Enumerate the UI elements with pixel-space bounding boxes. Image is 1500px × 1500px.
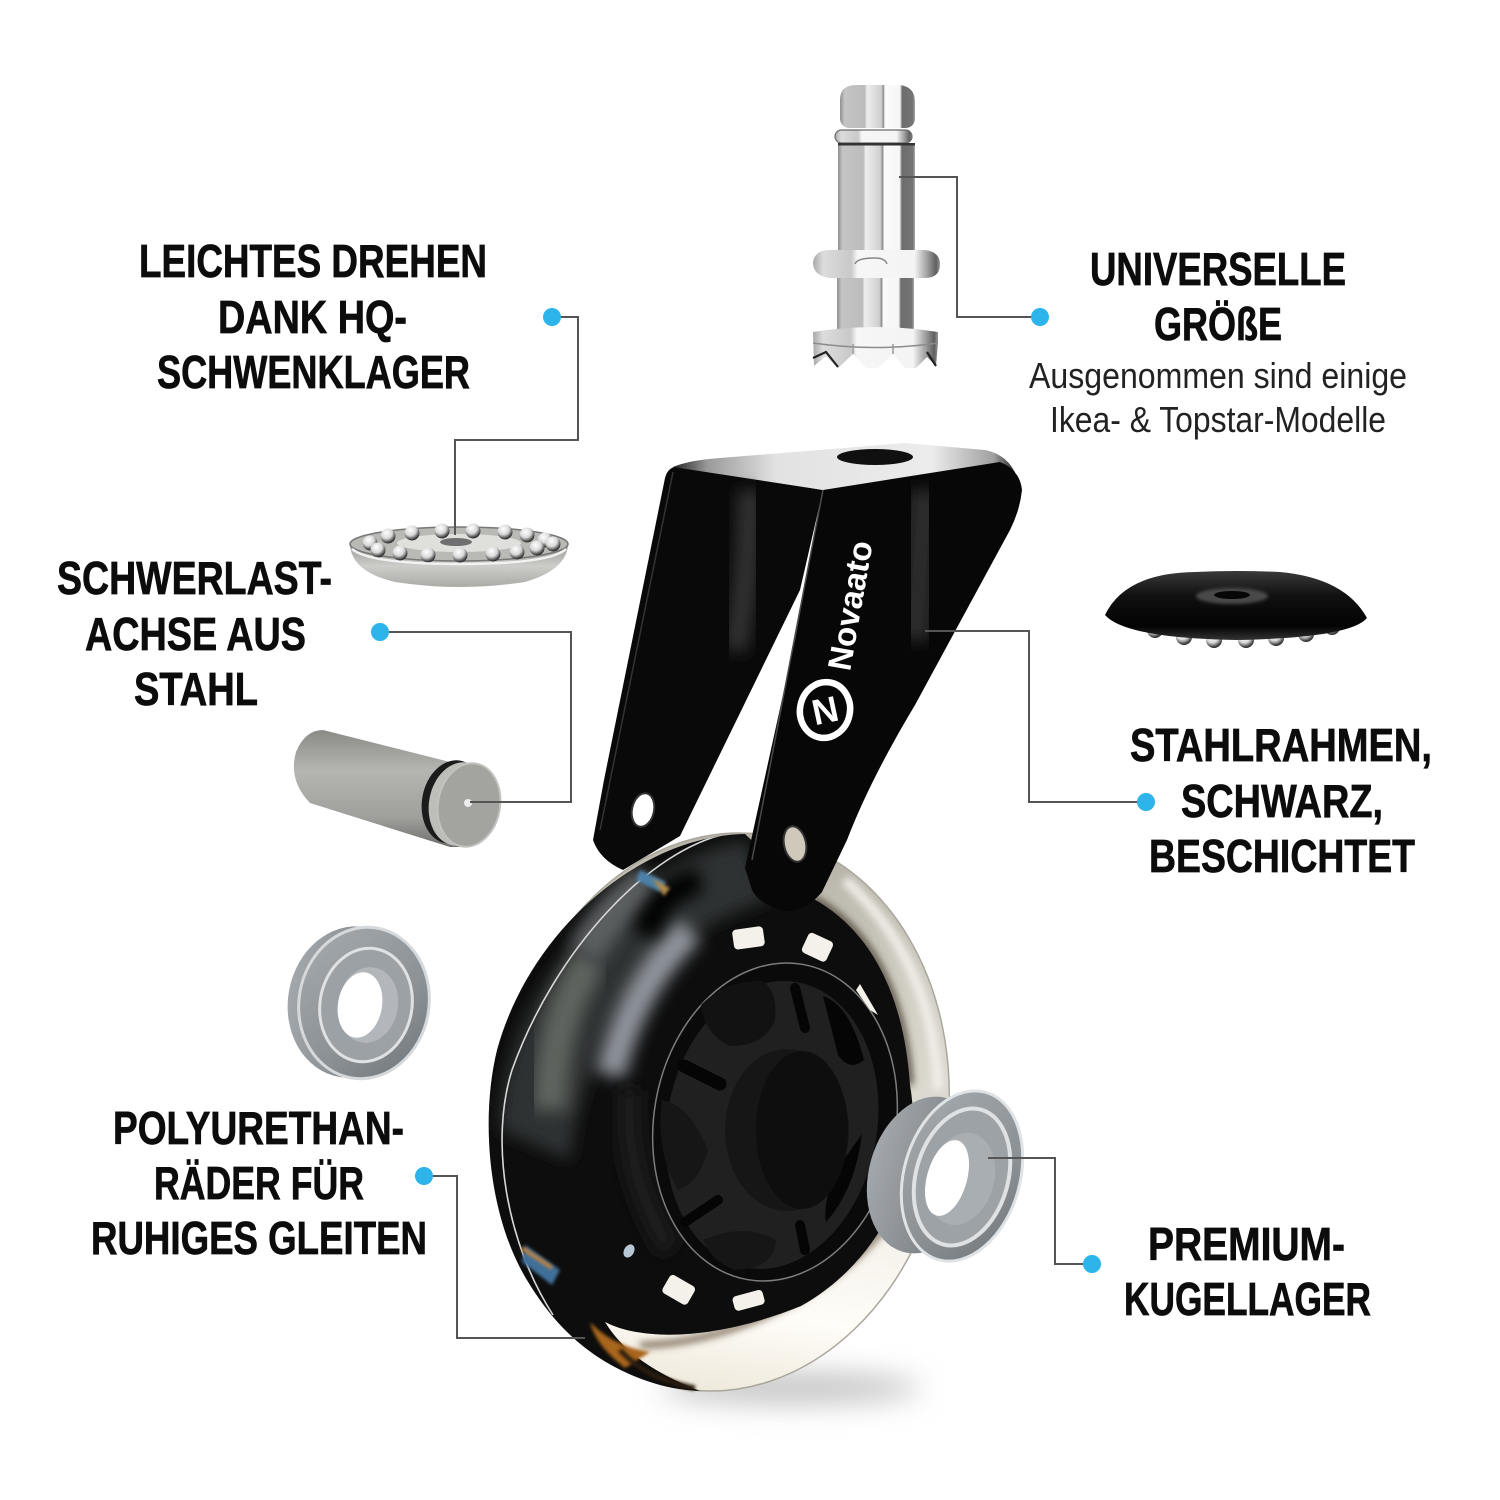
heading: polyurethane wheels: RUHIGES GLEITEN	[91, 1212, 427, 1264]
heading: heavy-duty axle: ACHSE AUS	[85, 608, 306, 660]
heading: heavy-duty axle	[57, 552, 332, 715]
logo: Novaato	[795, 538, 880, 743]
icon: front ball bearing	[849, 1076, 1042, 1276]
heading: premium bearings: KUGELLAGER	[1124, 1273, 1371, 1325]
callout: axle connector	[371, 623, 571, 802]
heading: universal size: UNIVERSELLE	[1090, 243, 1346, 295]
heading: easy swivel: LEICHTES DREHEN	[139, 235, 487, 287]
icon: wheel shadow	[660, 1372, 920, 1404]
callout: premium bearing connector	[988, 1158, 1101, 1273]
heading: polyurethane wheels: RÄDER FÜR	[154, 1157, 364, 1209]
logo: Novaato: Novaato	[820, 538, 880, 673]
callout: steel frame connector	[925, 631, 1155, 811]
logo: Novaato: N	[808, 688, 842, 733]
heading: polyurethane wheels: POLYURETHAN-	[113, 1102, 404, 1154]
heading: steel frame: BESCHICHTET	[1149, 830, 1415, 882]
callout: wheel connector	[415, 1167, 585, 1338]
heading: heavy-duty axle: SCHWERLAST-	[57, 552, 332, 604]
heading: premium bearings	[1124, 1218, 1371, 1325]
icon: ball bearing plate	[350, 524, 568, 587]
text: exceptions note: Ikea- & Topstar-Modelle	[1050, 399, 1386, 440]
heading: steel frame: STAHLRAHMEN,	[1130, 719, 1432, 771]
text: exceptions note: Ausgenommen sind einige	[1029, 355, 1407, 396]
heading: heavy-duty axle: STAHL	[134, 663, 258, 715]
callout: swivel bearing connector	[455, 308, 578, 535]
icon: steel bracket	[593, 443, 1022, 911]
icon: mounting pin	[813, 85, 940, 368]
heading: polyurethane wheels	[91, 1102, 427, 1264]
text: exceptions note	[1029, 355, 1407, 440]
icon: polyurethane wheel	[488, 832, 950, 1393]
heading: easy swivel	[139, 235, 487, 398]
icon: black ball plate	[1105, 571, 1367, 648]
heading: easy swivel: SCHWENKLAGER	[157, 346, 470, 398]
wheel hub	[628, 943, 922, 1301]
wheel window slots	[621, 926, 878, 1312]
heading: steel frame	[1130, 719, 1432, 882]
heading: universal size	[1090, 243, 1346, 350]
heading: easy swivel: DANK HQ-	[218, 291, 407, 343]
heading: premium bearings: PREMIUM-	[1148, 1218, 1345, 1270]
callout: universal size connector	[899, 177, 1049, 326]
icon: steel axle	[294, 730, 507, 852]
heading: steel frame: SCHWARZ,	[1181, 775, 1383, 827]
heading: universal size: GRÖßE	[1154, 298, 1282, 350]
icon: rear ball bearing	[276, 916, 441, 1089]
